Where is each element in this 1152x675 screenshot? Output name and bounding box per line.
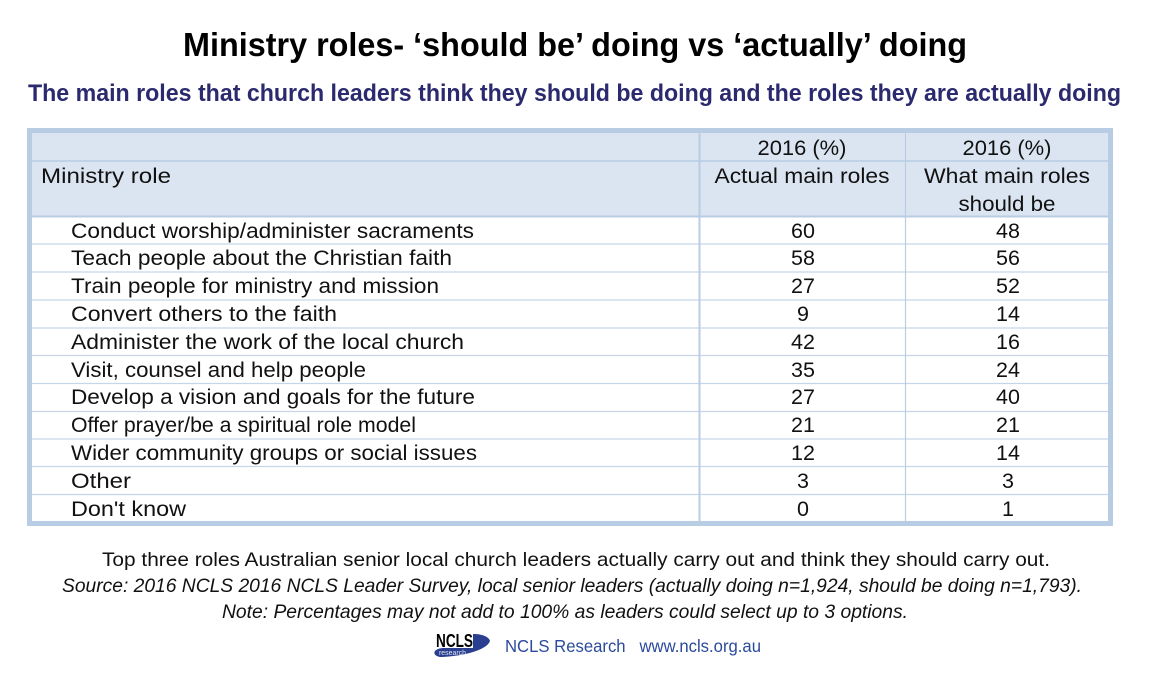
table header: should be	[958, 192, 1056, 216]
row labels: Other	[71, 469, 131, 493]
row labels	[71, 219, 477, 521]
row labels: Administer the work of the local church	[71, 330, 464, 354]
table: ministry roles	[30, 130, 1110, 524]
column: what main roles should be values	[996, 219, 1020, 521]
caption and notes: Note: Percentages may not add to 100% as leaders could select up to 3 options.	[222, 601, 908, 623]
column: what main roles should be values: 21	[996, 413, 1020, 437]
table header: 2016 (%)	[962, 136, 1052, 160]
column: what main roles should be values: 16	[996, 330, 1020, 354]
row labels: Conduct worship/administer sacraments	[71, 219, 474, 243]
column: what main roles should be values: 1	[1002, 497, 1014, 521]
row labels: Convert others to the faith	[71, 302, 337, 326]
icon: NCLS logo: research	[439, 650, 466, 657]
column: actual main roles values: 60	[791, 219, 815, 243]
row labels: Wider community groups or social issues	[71, 441, 477, 465]
column: actual main roles values: 35	[791, 358, 815, 382]
icon: NCLS logo	[434, 631, 490, 657]
column: actual main roles values: 21	[791, 413, 815, 437]
column: what main roles should be values: 14	[996, 302, 1020, 326]
title: Ministry roles- ‘should be’ doing vs ‘actually’ doing	[183, 27, 967, 64]
column: what main roles should be values: 24	[996, 358, 1020, 382]
column: actual main roles values: 0	[797, 497, 809, 521]
table header: 2016 (%)	[758, 136, 846, 160]
table header: Ministry role	[41, 164, 171, 188]
column: what main roles should be values: 52	[996, 274, 1020, 298]
column: what main roles should be values: 56	[996, 246, 1020, 270]
table header: Actual main roles	[714, 164, 890, 188]
column: what main roles should be values: 40	[996, 385, 1020, 409]
column: actual main roles values: 3	[797, 469, 809, 493]
row labels: Offer prayer/be a spiritual role model	[71, 413, 416, 437]
column: actual main roles values: 12	[791, 441, 815, 465]
row labels: Don't know	[71, 497, 187, 521]
column: actual main roles values: 27	[791, 385, 815, 409]
caption and notes	[62, 549, 1082, 623]
column: what main roles should be values: 3	[1002, 469, 1014, 493]
row labels: Develop a vision and goals for the future	[71, 385, 475, 409]
column: what main roles should be values: 14	[996, 441, 1020, 465]
table header	[41, 136, 1090, 216]
column: actual main roles values: 9	[797, 302, 809, 326]
row labels: Visit, counsel and help people	[71, 358, 366, 382]
icon: NCLS logo: NCLS	[436, 631, 473, 651]
column: what main roles should be values: 48	[996, 219, 1020, 243]
column: actual main roles values: 58	[791, 246, 815, 270]
footer: NCLS Research and website: NCLS Research www.ncls.org.au	[505, 636, 761, 656]
column: actual main roles values: 27	[791, 274, 815, 298]
row labels: Teach people about the Christian faith	[71, 246, 452, 270]
table header: What main roles	[924, 164, 1090, 188]
subtitle: The main roles that church leaders think they should be doing and the roles they are actually doing	[28, 80, 1121, 107]
column: actual main roles values	[791, 219, 815, 521]
caption and notes: Source: 2016 NCLS 2016 NCLS Leader Survey, local senior leaders (actually doing n=1,924, should be doing n=1,793).	[62, 575, 1082, 597]
column: actual main roles values: 42	[791, 330, 815, 354]
row labels: Train people for ministry and mission	[71, 274, 439, 298]
caption and notes: Top three roles Australian senior local church leaders actually carry out and think they should carry out.	[102, 549, 1050, 571]
